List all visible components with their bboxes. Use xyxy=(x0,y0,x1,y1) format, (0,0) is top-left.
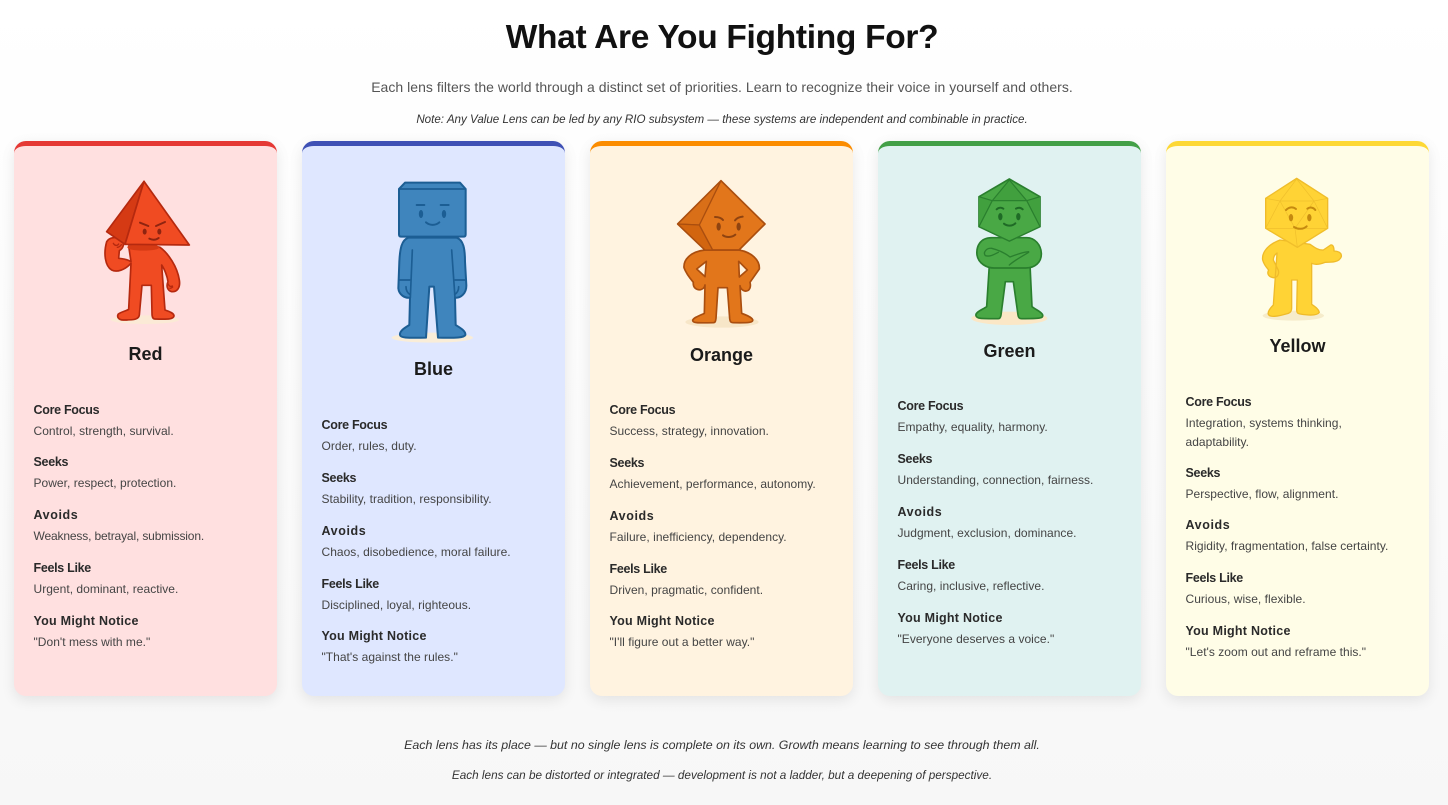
section: core focus: adaptability. xyxy=(1186,435,1249,449)
section: feels like: Disciplined, loyal, righteous. xyxy=(322,598,471,612)
panel: green lens xyxy=(878,141,1141,696)
section: feels like: Feels Like xyxy=(898,558,955,572)
section: you might notice xyxy=(34,614,150,649)
section: seeks: Seeks xyxy=(322,471,356,485)
section: seeks xyxy=(322,471,492,506)
section: seeks: Seeks xyxy=(898,452,932,466)
section: feels like: Feels Like xyxy=(1186,571,1243,585)
heading: Green: Green xyxy=(983,341,1036,361)
section: you might notice: "Everyone deserves a voice." xyxy=(898,632,1054,646)
section: feels like: Caring, inclusive, reflective. xyxy=(898,579,1044,593)
icon: green polyhedron-head character xyxy=(971,178,1048,325)
panel: yellow lens xyxy=(1166,141,1429,696)
heading: Orange: Orange xyxy=(690,345,753,365)
section: core focus xyxy=(610,403,769,438)
section: you might notice: "I'll figure out a better way." xyxy=(610,635,754,649)
section: avoids: Avoids xyxy=(322,524,366,538)
section: feels like xyxy=(898,558,1044,593)
section: feels like xyxy=(34,561,178,596)
title: What Are You Fighting For? xyxy=(506,19,938,56)
panel: blue lens xyxy=(302,141,565,696)
section: core focus: Control, strength, survival. xyxy=(34,424,174,438)
section: you might notice: You Might Notice xyxy=(898,611,1003,625)
section: avoids: Chaos, disobedience, moral failure. xyxy=(322,545,511,559)
heading: Yellow: Yellow xyxy=(1269,336,1326,356)
section: feels like xyxy=(322,577,471,612)
section: you might notice: "That's against the rules." xyxy=(322,650,458,664)
section: you might notice: You Might Notice xyxy=(610,614,715,628)
section: avoids: Avoids xyxy=(1186,518,1230,532)
section: seeks: Perspective, flow, alignment. xyxy=(1186,487,1338,501)
panel: orange lens xyxy=(590,141,853,696)
section: you might notice xyxy=(610,614,754,649)
section: feels like: Curious, wise, flexible. xyxy=(1186,592,1306,606)
section: core focus: Core Focus xyxy=(898,399,963,413)
heading: Red: Red xyxy=(128,344,162,364)
section: avoids xyxy=(1186,518,1388,553)
section: avoids: Rigidity, fragmentation, false certainty. xyxy=(1186,539,1388,553)
section: you might notice xyxy=(1186,624,1366,659)
section: seeks: Power, respect, protection. xyxy=(34,476,176,490)
icon: blue cube-head character xyxy=(392,182,473,343)
subtitle: Each lens filters the world through a distinct set of priorities. Learn to recognize their voice in yourself and others. xyxy=(371,79,1073,95)
panel: red lens xyxy=(14,141,277,696)
section: feels like xyxy=(610,562,763,597)
section: you might notice: You Might Notice xyxy=(34,614,139,628)
section: avoids: Avoids xyxy=(34,508,78,522)
note: Note: Any Value Lens can be led by any RIO subsystem — these systems are independent and combinable in practice. xyxy=(416,113,1028,126)
section: core focus xyxy=(322,418,417,453)
section: feels like: Feels Like xyxy=(610,562,667,576)
section: core focus: Success, strategy, innovation. xyxy=(610,424,769,438)
section: feels like: Feels Like xyxy=(34,561,91,575)
section: feels like: Urgent, dominant, reactive. xyxy=(34,582,178,596)
section: core focus xyxy=(898,399,1048,434)
section: seeks xyxy=(34,455,176,490)
icon: red pyramid-head character xyxy=(104,180,190,324)
section: core focus: Core Focus xyxy=(1186,395,1251,409)
section: seeks: Achievement, performance, autonomy. xyxy=(610,477,816,491)
section: core focus: Integration, systems thinking, xyxy=(1186,416,1342,430)
section: avoids xyxy=(322,524,511,559)
section: seeks: Seeks xyxy=(34,455,68,469)
section: avoids: Judgment, exclusion, dominance. xyxy=(898,526,1077,540)
section: core focus xyxy=(34,403,174,438)
section: you might notice: "Don't mess with me." xyxy=(34,635,150,649)
section: core focus: Order, rules, duty. xyxy=(322,439,417,453)
icon: orange diamond-head character xyxy=(676,180,766,328)
section: seeks xyxy=(898,452,1093,487)
section: seeks xyxy=(1186,466,1338,501)
section: you might notice: "Let's zoom out and reframe this." xyxy=(1186,645,1366,659)
section: seeks: Seeks xyxy=(1186,466,1220,480)
section: you might notice: You Might Notice xyxy=(322,629,427,643)
section: avoids: Avoids xyxy=(898,505,942,519)
section: core focus xyxy=(1186,395,1342,449)
section: seeks: Seeks xyxy=(610,456,644,470)
section: feels like: Feels Like xyxy=(322,577,379,591)
section: you might notice xyxy=(322,629,458,664)
section: core focus: Core Focus xyxy=(34,403,99,417)
section: seeks: Understanding, connection, fairness. xyxy=(898,473,1093,487)
section: core focus: Core Focus xyxy=(322,418,387,432)
section: you might notice: You Might Notice xyxy=(1186,624,1291,638)
section: core focus: Core Focus xyxy=(610,403,675,417)
section: seeks xyxy=(610,456,816,491)
section: feels like xyxy=(1186,571,1306,606)
section: core focus: Empathy, equality, harmony. xyxy=(898,420,1048,434)
footer line 2: Each lens can be distorted or integrated — development is not a ladder, but a deepening of perspective. xyxy=(452,769,992,782)
footer line 1: Each lens has its place — but no single lens is complete on its own. Growth means learning to see through them all. xyxy=(404,738,1040,752)
section: avoids xyxy=(34,508,204,543)
section: feels like: Driven, pragmatic, confident. xyxy=(610,583,763,597)
section: avoids xyxy=(610,509,787,544)
section: avoids: Failure, inefficiency, dependency. xyxy=(610,530,787,544)
icon: yellow icosahedron-head character xyxy=(1262,178,1342,320)
section: avoids: Weakness, betrayal, submission. xyxy=(34,529,204,543)
section: avoids: Avoids xyxy=(610,509,654,523)
heading: Blue: Blue xyxy=(414,359,453,379)
section: avoids xyxy=(898,505,1077,540)
section: you might notice xyxy=(898,611,1054,646)
section: seeks: Stability, tradition, responsibility. xyxy=(322,492,492,506)
